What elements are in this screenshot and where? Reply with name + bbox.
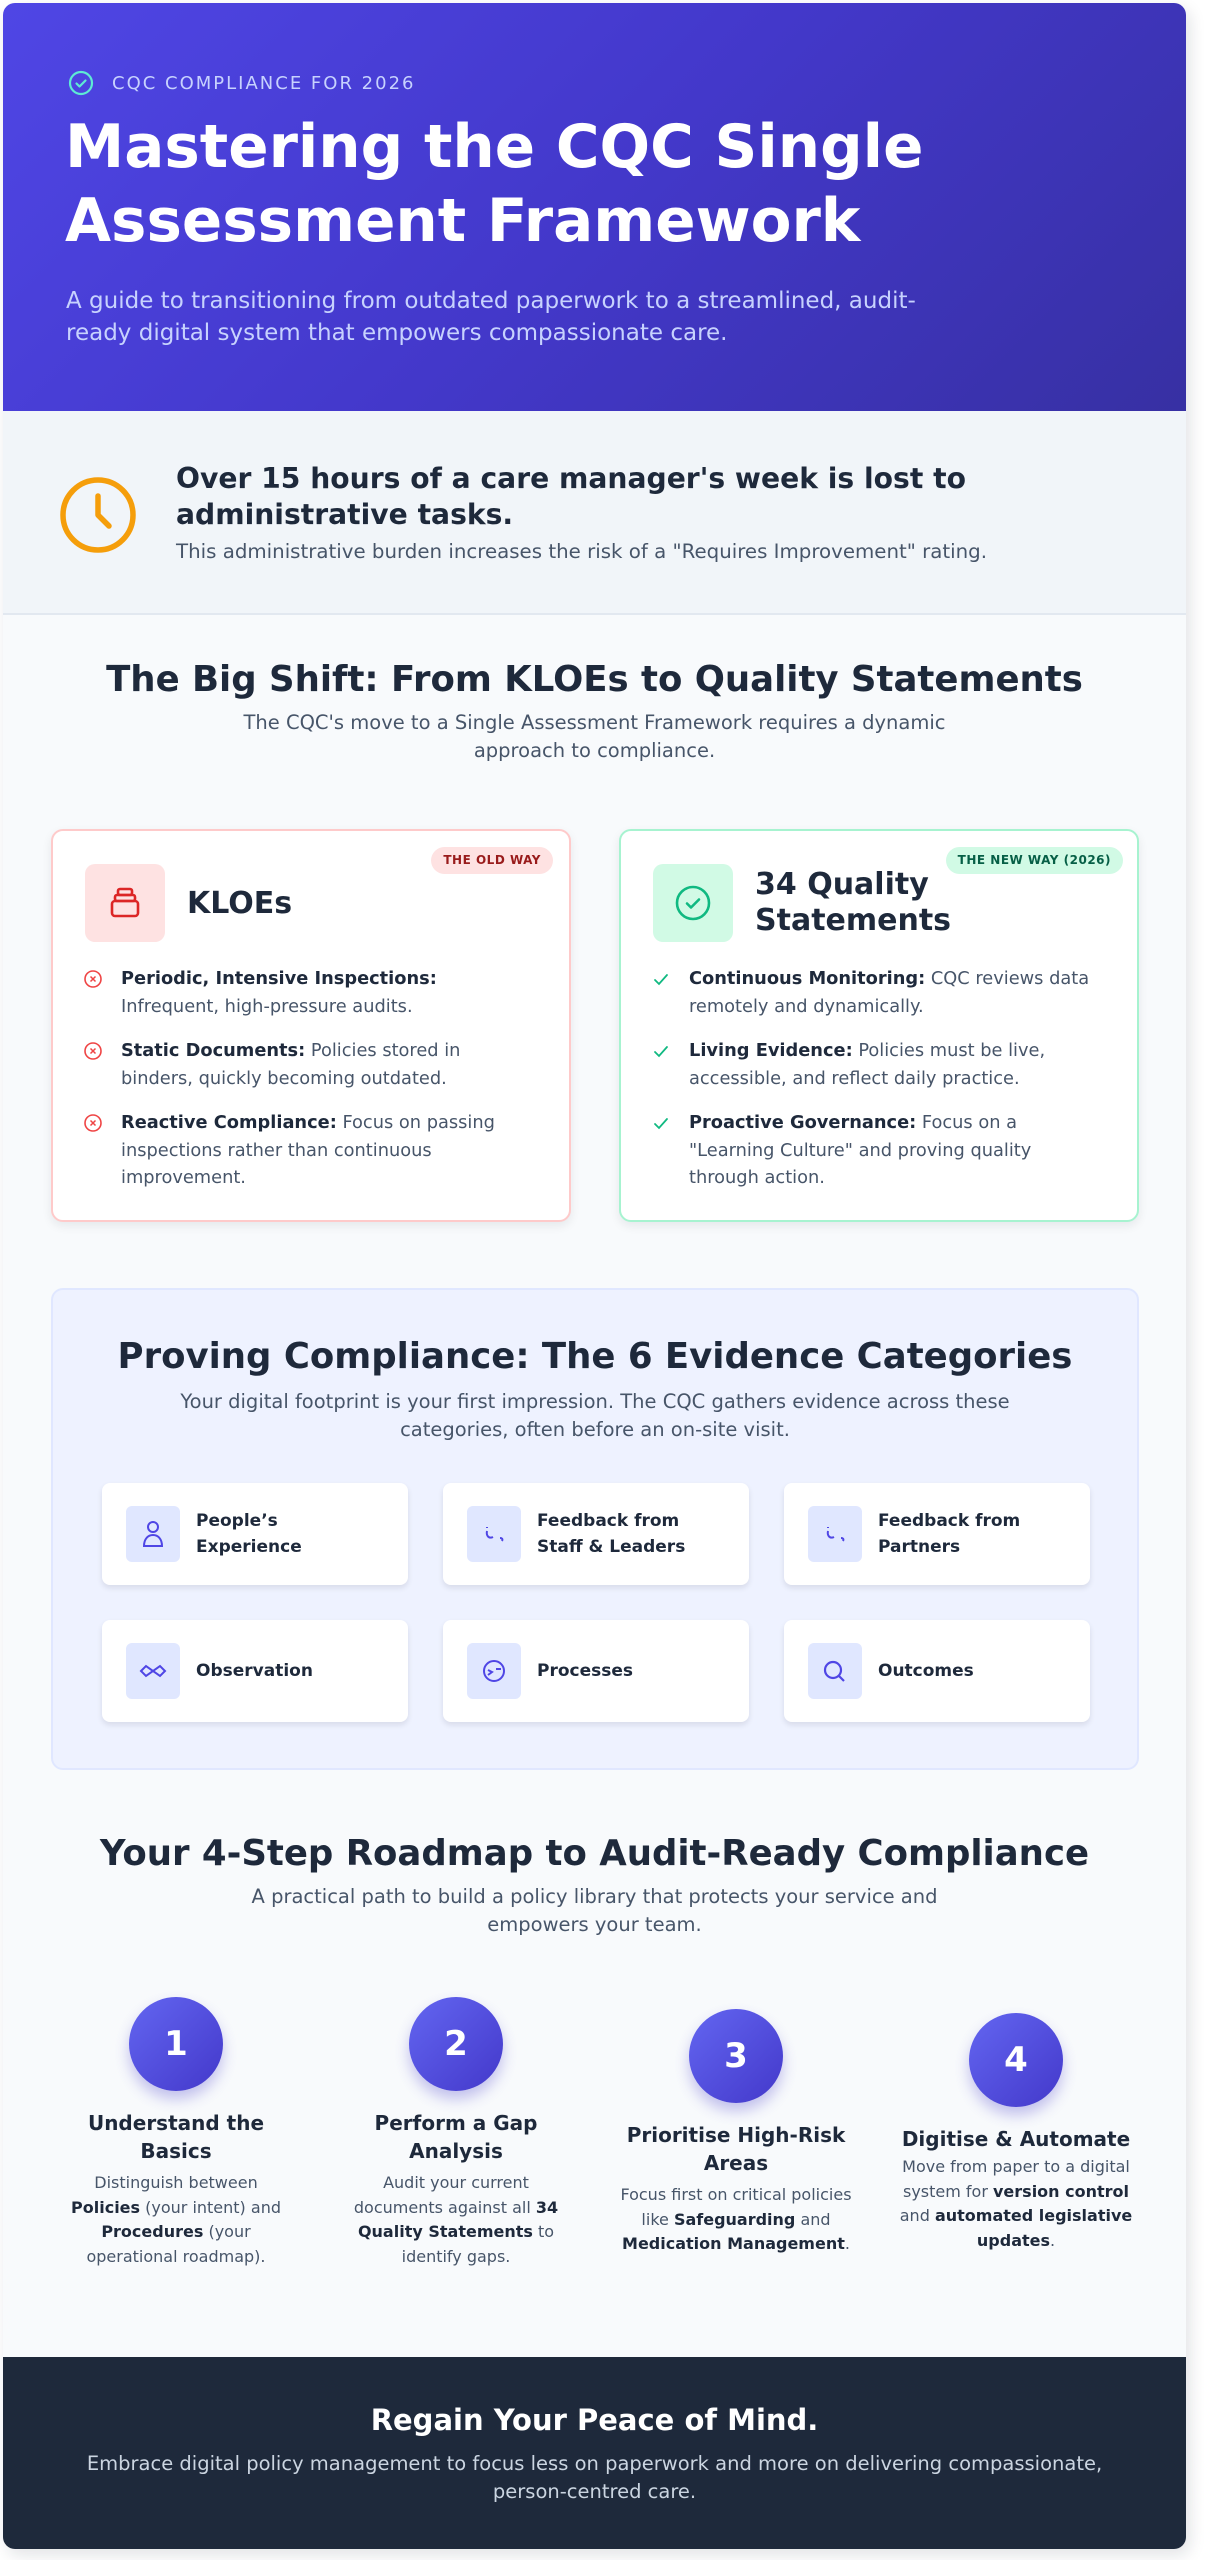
roadmap steps <box>71 1997 1132 2266</box>
heading: evidence: Proving Compliance: The 6 Evidence Categories <box>118 1336 1072 1377</box>
step 2: 2 <box>444 2024 468 2064</box>
step 3: 3 <box>724 2036 748 2076</box>
item 2: Living Evidence: Policies must be live, accessible, and reflect daily practice. <box>689 1040 1045 1088</box>
tag line: CQC COMPLIANCE FOR 2026 <box>112 72 415 94</box>
card: observation: Observation <box>196 1661 313 1681</box>
text: roadmap intro: A practical path to build a policy library that protects your service and empowers your team. <box>252 1885 937 1936</box>
item 3: Proactive Governance: Focus on a "Learning Culture" and proving quality through action. <box>689 1112 1031 1188</box>
step 1 <box>71 1997 281 2266</box>
title: Mastering the CQC Single Assessment Framework <box>65 113 923 256</box>
heading: KLOEs: KLOEs <box>187 886 292 921</box>
step 1: Distinguish between Policies (your intent) and Procedures (your operational roadmap). <box>71 2173 281 2266</box>
card: partner feedback <box>784 1483 1090 1585</box>
step 4: Digitise & Automate <box>902 2127 1130 2151</box>
step 3 <box>620 2009 852 2253</box>
heading: big shift: The Big Shift: From KLOEs to Quality Statements <box>106 659 1083 700</box>
item 1: Infrequent, high-pressure audits. <box>121 996 413 1016</box>
badge: new way: THE NEW WAY (2026) <box>958 853 1111 867</box>
step 4: Move from paper to a digital system for version control and automated legislative updates. <box>900 2157 1132 2250</box>
item 3: Reactive Compliance: Focus on passing inspections rather than continuous improvement. <box>121 1112 495 1188</box>
card: partner feedback: Feedback from <box>878 1511 1020 1531</box>
card: people's experience <box>102 1483 408 1585</box>
icon: check circle <box>68 70 94 96</box>
icon: clock <box>60 477 136 553</box>
footer <box>3 2357 1186 2549</box>
card: processes: Processes <box>537 1661 633 1681</box>
step 2: Audit your current documents against all 34 Quality Statements to identify gaps. <box>354 2173 558 2266</box>
card: partner feedback: Partners <box>878 1537 960 1557</box>
card: staff feedback: Staff & Leaders <box>537 1537 685 1557</box>
icon: check circle <box>653 864 733 942</box>
item 2: Static Documents: Policies stored in binders, quickly becoming outdated. <box>121 1040 460 1088</box>
stat note: This administrative burden increases the risk of a "Requires Improvement" rating. <box>176 540 987 563</box>
list: old way items <box>84 968 495 1188</box>
item 1 <box>84 968 437 1016</box>
step 2: Perform a Gap Analysis <box>375 2111 537 2163</box>
badge: old way <box>431 847 553 874</box>
card: observation <box>102 1620 408 1722</box>
badge: old way: THE OLD WAY <box>443 853 541 867</box>
step 4 <box>900 2013 1132 2250</box>
stat band <box>3 411 1186 615</box>
footer text: Embrace digital policy management to focus less on paperwork and more on delivering compassionate, person-centred care. <box>87 2452 1102 2503</box>
panel: evidence categories <box>51 1288 1139 1770</box>
step 3: Focus first on critical policies like Safeguarding and Medication Management. <box>620 2185 852 2253</box>
heading: 34 quality statements <box>755 867 951 938</box>
heading: roadmap: Your 4-Step Roadmap to Audit-Ready Compliance <box>100 1833 1089 1874</box>
text: big shift intro: The CQC's move to a Single Assessment Framework requires a dynamic approach to compliance. <box>244 711 946 762</box>
stat headline: Over 15 hours of a care manager's week is lost to administrative tasks. <box>176 462 966 531</box>
icon: stacked boxes <box>85 864 165 942</box>
panel: old way <box>51 829 571 1222</box>
card: outcomes: Outcomes <box>878 1661 974 1681</box>
subtitle: A guide to transitioning from outdated paperwork to a streamlined, audit-ready digital system that empowers compassionate care. <box>66 288 916 346</box>
header <box>3 3 1186 411</box>
panel: new way <box>619 829 1139 1222</box>
list: new way items <box>654 968 1089 1188</box>
step 3: Prioritise High-Risk Areas <box>627 2123 845 2175</box>
badge: new way <box>946 847 1123 874</box>
heading: 34 quality statements: Statements <box>755 903 951 938</box>
text: evidence intro: Your digital footprint is your first impression. The CQC gathers evidence across these categories, often before an on-site visit. <box>180 1390 1010 1441</box>
card: outcomes <box>784 1620 1090 1722</box>
heading: 34 quality statements: 34 Quality <box>755 867 929 902</box>
card: people's experience: People’s <box>196 1511 278 1531</box>
card: staff feedback <box>443 1483 749 1585</box>
step 1: Understand the Basics <box>88 2111 264 2163</box>
step 4: 4 <box>1004 2040 1028 2080</box>
step 2 <box>354 1997 558 2266</box>
card: people's experience: Experience <box>196 1537 302 1557</box>
card: processes <box>443 1620 749 1722</box>
step 1: 1 <box>164 2024 188 2064</box>
footer heading: Regain Your Peace of Mind. <box>371 2403 818 2437</box>
item 1: Continuous Monitoring: CQC reviews data remotely and dynamically. <box>689 968 1089 1016</box>
card: staff feedback: Feedback from <box>537 1511 679 1531</box>
item 1: Periodic, Intensive Inspections: <box>121 968 437 989</box>
